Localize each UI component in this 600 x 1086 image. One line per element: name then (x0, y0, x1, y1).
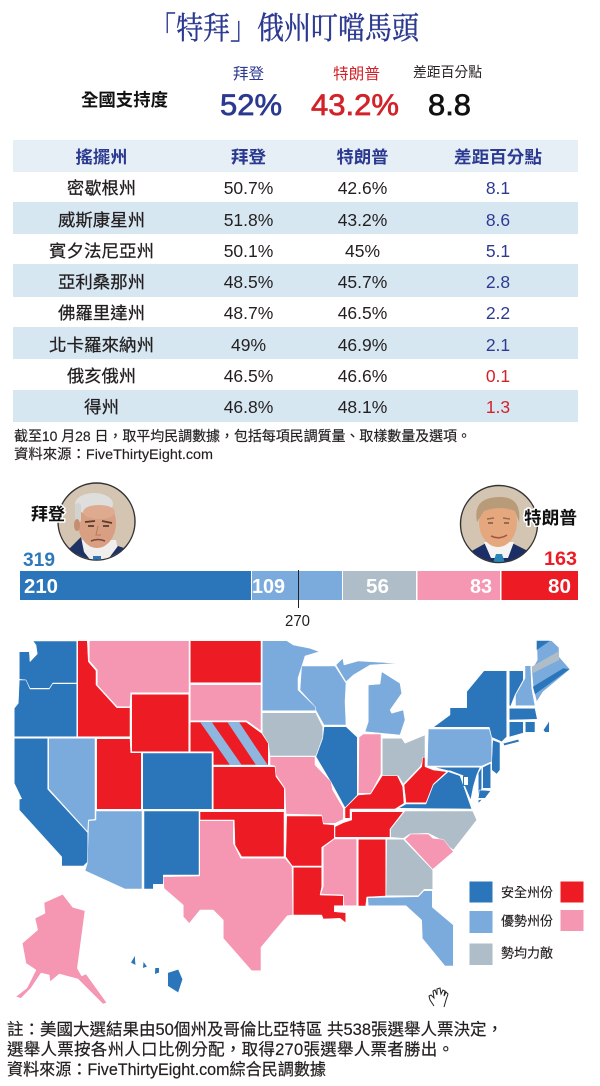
Biden heading: 拜登 (233, 65, 264, 83)
legend: 勢均力敵 (501, 946, 553, 960)
Biden electoral total: 319 (23, 550, 55, 571)
panel: national support (81, 64, 482, 122)
table notes: 截至10 月28 日，取平均民調數據，包括每項民調質量、取樣數量及選項。 (14, 428, 471, 444)
table header: 差距百分點 (454, 148, 542, 167)
270 threshold marker: 270 (285, 613, 310, 630)
Trump electoral total: 163 (544, 549, 577, 570)
row: Arizona: 45.7% (338, 272, 387, 292)
row: Wisconsin: 51.8% (224, 210, 273, 230)
row: Texas (84, 397, 510, 417)
row: Texas: 46.8% (224, 397, 273, 417)
row: Florida (58, 303, 510, 323)
Trump heading: 特朗普 (333, 65, 380, 83)
segment: lean Biden 109: 109 (252, 576, 285, 598)
row: North Carolina: 49% (231, 335, 266, 355)
row: Ohio (67, 366, 510, 386)
row: Michigan: 密歇根州 (67, 179, 136, 198)
segment: safe Trump 80: 80 (548, 576, 571, 598)
table notes: 資料來源：FiveThirtyEight.com (14, 446, 213, 462)
row: Texas: 48.1% (338, 397, 387, 417)
row: Wisconsin: 43.2% (338, 210, 387, 230)
row: Arizona (58, 272, 510, 292)
segment: lean Trump 83: 83 (470, 576, 492, 598)
label: Trump: 特朗普 (524, 508, 577, 528)
title: 「特拜」俄州叮噹馬頭 (149, 11, 420, 46)
table header: 拜登 (231, 148, 266, 167)
row: North Carolina: 北卡羅來納州 (49, 336, 154, 355)
row: Ohio: 0.1 (486, 366, 510, 386)
US electoral map (14, 641, 570, 1004)
legend: 優勢州份 (501, 914, 553, 928)
row: Texas: 1.3 (486, 397, 510, 417)
row: Texas: 得州 (84, 398, 119, 417)
segment: lean Biden 109 (252, 571, 342, 600)
row: Pennsylvania: 5.1 (486, 241, 510, 261)
row: Pennsylvania: 賓夕法尼亞州 (49, 242, 154, 261)
table header (76, 147, 542, 167)
label: Biden: 拜登 (31, 505, 65, 524)
Biden national value: 52% (220, 89, 282, 122)
footnote: 資料來源：FiveThirtyEight.com綜合民調數據 (7, 1060, 326, 1079)
row: Arizona: 2.8 (486, 272, 510, 292)
row: Florida: 2.2 (486, 303, 510, 323)
table notes (14, 428, 471, 462)
row: Arizona: 亞利桑那州 (58, 273, 145, 292)
portrait: Trump (460, 486, 538, 566)
segment: safe Biden 210 (20, 571, 251, 600)
row: Wisconsin: 8.6 (486, 210, 510, 230)
row: North Carolina (49, 335, 510, 355)
row: Pennsylvania (49, 241, 510, 261)
row: Florida: 48.7% (224, 303, 273, 323)
margin national value: 8.8 (428, 89, 471, 122)
270 threshold marker (285, 570, 310, 630)
Trump national value: 43.2% (311, 89, 399, 122)
table header: 特朗普 (336, 147, 388, 167)
row: Arizona: 48.5% (224, 272, 273, 292)
portrait: Biden (56, 483, 136, 564)
row: Florida: 46.5% (338, 303, 387, 323)
segment: lean Trump 83 (418, 571, 500, 600)
segment: toss-up 56 (343, 571, 416, 600)
electoral vote bar (20, 571, 578, 600)
row: Pennsylvania: 45% (345, 241, 380, 261)
row: Wisconsin (58, 210, 510, 230)
row: Michigan: 42.6% (338, 178, 387, 198)
row: North Carolina: 46.9% (338, 335, 387, 355)
row: Wisconsin: 威斯康星州 (58, 211, 145, 230)
segment: safe Trump 80 (502, 571, 578, 600)
margin heading: 差距百分點 (413, 64, 482, 80)
segment: toss-up 56: 56 (366, 576, 389, 598)
footnote: 註：美國大選結果由50個州及哥倫比亞特區 共538張選舉人票決定， (7, 1020, 503, 1039)
table header: 搖擺州 (76, 148, 128, 167)
row: Ohio: 46.6% (338, 366, 387, 386)
swing state table (13, 140, 578, 422)
segment: safe Biden 210: 210 (24, 576, 58, 598)
row: Michigan: 8.1 (486, 178, 510, 198)
row: North Carolina: 2.1 (486, 335, 510, 355)
footnote: 選舉人票按各州人口比例分配，取得270張選舉人票者勝出。 (7, 1040, 454, 1059)
footnote (7, 1020, 503, 1079)
icon: hand cursor (429, 988, 448, 1007)
legend (470, 882, 584, 965)
row: Michigan (67, 178, 510, 198)
row: Florida: 佛羅里達州 (58, 304, 145, 323)
row: Pennsylvania: 50.1% (224, 241, 273, 261)
national support label: 全國支持度 (81, 90, 168, 110)
row: Michigan: 50.7% (224, 178, 273, 198)
row: Ohio: 46.5% (224, 366, 273, 386)
row: Ohio: 俄亥俄州 (67, 367, 136, 386)
legend: 安全州份 (501, 885, 553, 900)
